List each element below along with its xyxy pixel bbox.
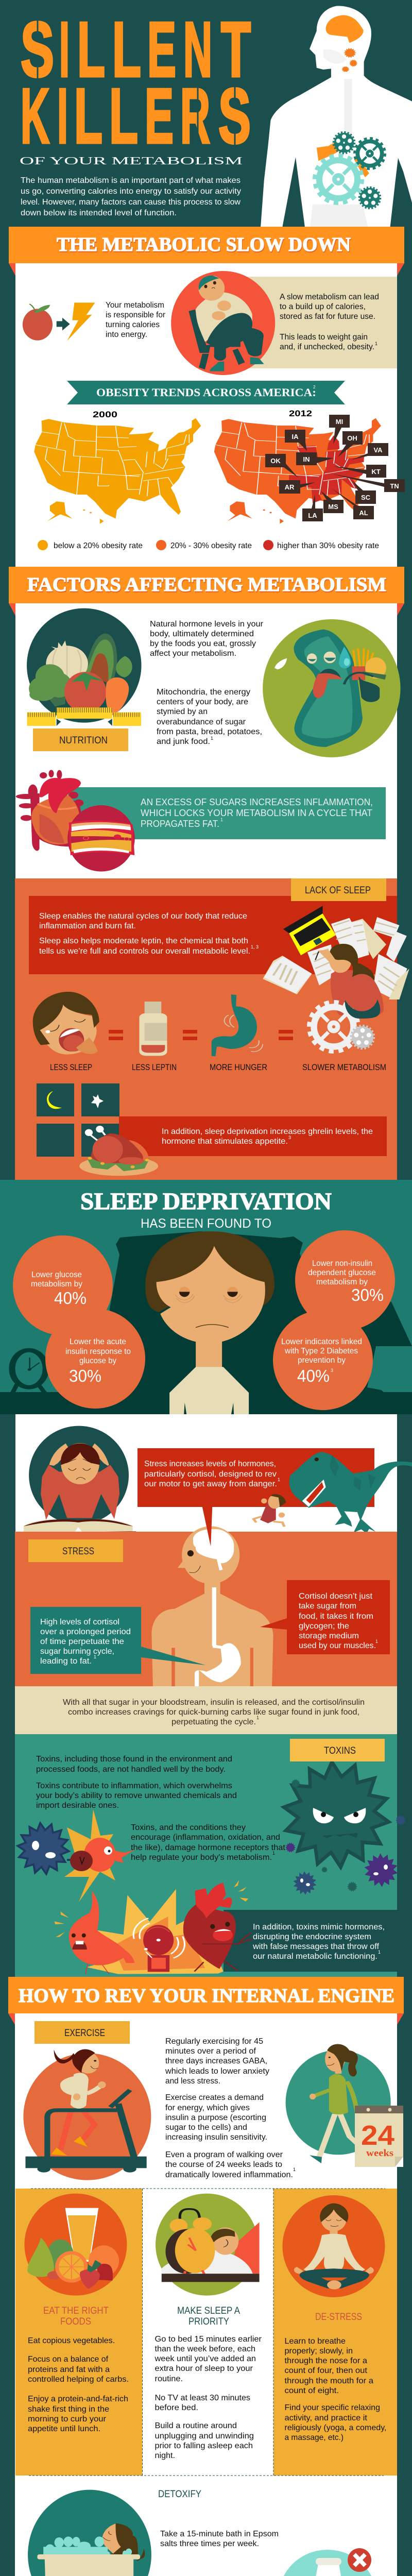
text: slow metabolism effects <box>280 293 379 351</box>
text: mitochondria: centers of your body, are <box>157 698 248 706</box>
illustration: overworked woman, laptop and papers <box>263 906 409 1018</box>
label: stress: STRESS <box>62 1546 94 1557</box>
text: sleep benefits: 1, 3 <box>251 944 259 950</box>
label: lack of sleep <box>291 878 386 901</box>
column: de-stress: DE-STRESS <box>315 2312 362 2323</box>
text: exercise: insulin a purpose (escorting <box>165 2113 266 2122</box>
title: L <box>112 6 141 93</box>
text: exercise: and less stress. <box>165 2077 220 2086</box>
title: T <box>221 6 251 93</box>
text: mimic hormones: 1 <box>378 1950 381 1955</box>
icon: less leptin bottle <box>139 1002 167 1056</box>
column: make sleep a priority: PRIORITY <box>188 2316 229 2327</box>
title: R <box>180 72 210 159</box>
heading: sleep deprivation <box>80 1188 332 1231</box>
callout: glycogen: storage medium <box>299 1632 359 1640</box>
illustration: tired mitochondria <box>263 619 401 757</box>
text: hormones: body, ultimately determined <box>150 630 254 638</box>
state callouts: IA <box>291 433 299 440</box>
callout: high cortisol: 1 <box>94 1654 96 1659</box>
band: insulin combo: With all that sugar in your bloodstream, insulin is released, and the cortisol/insulin <box>63 1698 365 1707</box>
illustration: walking woman <box>286 2044 391 2163</box>
text: mimic hormones: our natural metabolic functioning. <box>253 1952 377 1961</box>
illustration: toxin punching receptor <box>13 1809 135 1902</box>
column: make sleep a priority: before bed. <box>154 2403 198 2412</box>
text: metabolism role: turning calories <box>106 320 160 329</box>
stat bubble: acute insulin response: 30% <box>69 1366 101 1385</box>
panel: factors affecting metabolism <box>15 603 397 878</box>
column: make sleep a priority: Go to bed 15 minutes earlier <box>154 2335 262 2344</box>
text: mitochondria: from pasta, bread, potatoes, <box>157 727 262 736</box>
text: hormones: Natural hormone levels in your <box>150 620 264 629</box>
text: exercise: Even a program of walking over <box>165 2150 283 2159</box>
heading: sleep deprivation: HAS BEEN FOUND TO <box>141 1216 271 1231</box>
text: slow metabolism effects: This leads to weight gain <box>280 333 368 342</box>
callout: glycogen: used by our muscles. <box>299 1641 376 1650</box>
column: eat the right foods <box>28 2306 129 2433</box>
text: mimic hormones: In addition, toxins mimic hormones, <box>253 1923 385 1931</box>
stat bubble: non-insulin glucose: metabolism by <box>316 1278 368 1286</box>
callout: glycogen: take sugar from <box>299 1602 356 1611</box>
label: stress <box>28 1539 123 1562</box>
equals signs <box>109 1030 293 1040</box>
stat bubble: type 2 diabetes: 40% <box>297 1366 330 1385</box>
stat bubble: acute insulin response: glucose by <box>79 1357 116 1365</box>
column: de-stress: Find your specific relaxing <box>284 2403 380 2412</box>
state callouts: MS <box>328 503 338 511</box>
banner: how to rev your internal engine <box>8 1977 404 2025</box>
text: toxins overview: Toxins contribute to inflammation, which overwhelms <box>36 1782 232 1790</box>
stat bubble: lower glucose metabolism: Lower glucose <box>31 1270 82 1279</box>
column: make sleep a priority: prior to falling asleep each <box>154 2442 253 2450</box>
column: eat the right foods: Focus on a balance of <box>28 2355 109 2364</box>
callout: ghrelin <box>119 1116 387 1156</box>
intro paragraph: level. However, many factors can cause this process to slow <box>21 198 241 207</box>
title: E <box>145 72 174 159</box>
legend: higher than 30% obesity rate <box>277 541 379 550</box>
column: eat the right foods: EAT THE RIGHT <box>43 2306 109 2316</box>
text: hormone receptors <box>131 1823 286 1862</box>
title <box>21 6 251 159</box>
window at night <box>37 1083 119 1157</box>
illustration: yawning face <box>33 992 99 1055</box>
subtitle: OF YOUR METABOLISM <box>20 155 243 167</box>
text: exercise: 1 <box>293 2167 296 2172</box>
stat bubble: non-insulin glucose <box>295 1230 395 1330</box>
callout: glycogen <box>260 1580 390 1654</box>
panel: mimic hormones <box>224 1910 397 1972</box>
equation labels: SLOWER METABOLISM <box>302 1062 386 1072</box>
label: lack of sleep: LACK OF SLEEP <box>305 885 371 896</box>
label: exercise: EXERCISE <box>64 2028 105 2039</box>
state callouts: SC <box>361 494 371 501</box>
column: de-stress: through the nose for a <box>284 2357 367 2365</box>
text: mitochondria: overabundance of sugar <box>157 718 246 726</box>
column: eat the right foods: shake first thing in the <box>28 2405 109 2414</box>
column: make sleep a priority: week until you’ve added an <box>154 2354 256 2363</box>
text: mitochondria: stymied by an <box>157 707 208 716</box>
stat bubble: lower glucose metabolism <box>13 1235 113 1335</box>
column: de-stress: properly; slowly, in <box>284 2347 353 2355</box>
column: de-stress: through the mouth for a <box>284 2377 373 2385</box>
text: mitochondria: and junk food. <box>157 737 210 746</box>
icon: calendar 24 weeks: weeks <box>366 2148 393 2159</box>
title: S <box>218 72 251 159</box>
text: exercise: for energy, which gives <box>165 2104 250 2112</box>
header: human body illustration <box>261 6 412 227</box>
title: I <box>59 6 70 93</box>
text: mimic hormones: disrupting the endocrine system <box>253 1933 371 1941</box>
panel: stress body <box>15 1532 397 1686</box>
state callouts: TN <box>390 482 399 490</box>
map: 2000 obesity <box>34 418 201 524</box>
text: exercise: the course of 24 weeks leads to <box>165 2160 282 2169</box>
text: toxins overview: import desirable ones. <box>36 1801 119 1810</box>
state callouts: OH <box>347 434 357 442</box>
callout: stress hormones: Stress increases levels of hormones, <box>144 1460 276 1468</box>
text: hormone receptors: the like), damage hormone receptors that <box>131 1843 286 1852</box>
text: toxins overview <box>36 1755 237 1810</box>
panel: de-stress <box>273 2189 397 2476</box>
title: S <box>21 6 54 93</box>
text: metabolism role: into energy. <box>106 330 147 339</box>
stat bubble: non-insulin glucose: Lower non-insulin <box>312 1259 372 1268</box>
title: K <box>21 72 49 159</box>
intro paragraph: The human metabolism is an important part of what makes <box>21 176 241 185</box>
title: L <box>77 6 105 93</box>
callout: high cortisol: sugar burning cycle, <box>40 1647 114 1656</box>
text: mitochondria <box>157 688 262 746</box>
stat bubble: type 2 diabetes: with Type 2 Diabetes <box>284 1347 358 1355</box>
text: exercise: minutes over a period of <box>165 2047 256 2056</box>
legend: 20% - 30% obesity rate <box>170 541 252 550</box>
column: make sleep a priority: No TV at least 30 minutes <box>154 2394 250 2402</box>
text: toxins overview: your body’s ability to remove unwanted chemicals and <box>36 1791 237 1800</box>
illustration: woman's foot <box>345 999 380 1019</box>
banner: factors affecting metabolism: FACTORS AFFECTING METABOLISM <box>27 574 386 596</box>
panel: stress upper <box>15 1414 397 1532</box>
stat bubble: type 2 diabetes: Lower indicators linked <box>281 1337 362 1346</box>
label: toxins <box>290 1739 385 1761</box>
column: make sleep a priority: than the week before, each <box>154 2345 255 2353</box>
heading: detoxify: DETOXIFY <box>158 2489 201 2500</box>
text: mimic hormones: with false messages that throw off <box>252 1942 380 1951</box>
band: excess sugars: 1 <box>220 817 223 822</box>
text: mitochondria: 1 <box>211 736 213 741</box>
stat bubble: acute insulin response: insulin response to <box>65 1347 131 1356</box>
icon: calendar 24 weeks: 24 <box>361 2120 394 2151</box>
column: de-stress: activity, and practice it <box>284 2414 368 2422</box>
column: eat the right foods: Enjoy a protein-and-fat-rich <box>28 2395 128 2403</box>
illustration: treadmill runner <box>23 2049 151 2180</box>
callout band: slow metabolism <box>223 277 397 368</box>
stat bubble: non-insulin glucose: 30% <box>351 1285 384 1304</box>
panel: how to rev <box>15 2013 397 2576</box>
text: hormone receptors: help regulate your body’s metabolism. <box>131 1853 272 1862</box>
column: make sleep a priority: Build a routine around <box>154 2421 237 2430</box>
text: epsom bath: salts three times per week. <box>160 2539 259 2548</box>
title: I <box>57 72 68 159</box>
text: epsom bath <box>160 2530 279 2548</box>
column: de-stress: religiously (yoga, a comedy, <box>284 2424 386 2432</box>
column: eat the right foods: proteins and fat with a <box>28 2365 110 2374</box>
callout: glycogen: glycogen; the <box>299 1622 349 1631</box>
banner: the metabolic slow down <box>9 227 404 276</box>
state callouts: AR <box>285 483 295 491</box>
text: exercise: Regularly exercising for 45 <box>165 2037 263 2046</box>
ribbon: obesity trends heading <box>67 381 345 404</box>
label: nutrition: NUTRITION <box>59 735 108 746</box>
banner: how to rev your internal engine: HOW TO REV YOUR INTERNAL ENGINE <box>19 1985 394 2007</box>
illustration: dinosaur chasing caveman <box>253 1452 412 1534</box>
callout: stress hormones: particularly cortisol, designed to rev <box>144 1470 277 1479</box>
title: N <box>183 6 212 93</box>
stat bubble: acute insulin response <box>45 1309 145 1409</box>
state callouts: IN <box>303 455 310 463</box>
state callouts: KT <box>371 468 381 476</box>
illustration: heart and clogged artery <box>16 770 135 872</box>
column: de-stress <box>284 2312 386 2442</box>
text: slow metabolism effects: to a build up of calories, <box>280 302 366 311</box>
callout: ghrelin: 3 <box>288 1135 291 1140</box>
callout: stress hormones: our motor to get away from danger. <box>144 1480 277 1488</box>
band: insulin combo <box>15 1686 397 1734</box>
text: toxins overview: Toxins, including those found in the environment and <box>36 1755 232 1764</box>
stat bubble: type 2 diabetes: prevention by <box>298 1356 346 1365</box>
ribbon: obesity trends heading: OBESITY TRENDS ACROSS AMERICA: <box>96 386 316 399</box>
text: toxins overview: processed foods, are not handled well by the body. <box>36 1765 226 1774</box>
text: sleep benefits: Sleep also helps moderate leptin, the chemical that both <box>39 937 248 945</box>
text: hormones: affect your metabolism. <box>150 649 236 658</box>
text: exercise: increasing insulin sensitivity. <box>165 2133 267 2142</box>
intro paragraph <box>21 176 241 217</box>
callout: high cortisol: of time perpetuate the <box>40 1637 124 1646</box>
band: excess sugars <box>68 787 386 839</box>
text: hormone receptors: encourage (inflammation, oxidation, and <box>131 1833 280 1842</box>
equation labels: MORE HUNGER <box>210 1062 267 1072</box>
state callouts: LA <box>308 512 317 519</box>
legend <box>38 540 379 550</box>
text: mimic hormones <box>252 1923 385 1961</box>
column: make sleep a priority: night. <box>154 2451 175 2460</box>
illustration: milk bottle with recycling logo <box>279 2548 376 2576</box>
text: slow metabolism effects: A slow metabolism can lead <box>280 293 379 301</box>
column: eat the right foods: controlled helping of carbs. <box>28 2375 129 2384</box>
callout: high cortisol: High levels of cortisol <box>40 1618 119 1626</box>
panel: metabolic slow down <box>15 263 397 567</box>
title: E <box>147 6 176 93</box>
illustration: meditating woman <box>282 2195 385 2297</box>
text: sleep benefits: Sleep enables the natural cycles of our body that reduce <box>39 912 247 921</box>
text: exercise <box>165 2037 296 2179</box>
equation labels <box>50 1062 386 1072</box>
illustration: roast turkey <box>79 1126 158 1176</box>
column: eat the right foods: FOODS <box>60 2316 91 2327</box>
text: sleep benefits <box>39 912 259 956</box>
text: exercise: Exercise creates a demand <box>165 2093 264 2102</box>
stat bubble: non-insulin glucose: dependent glucose <box>308 1268 376 1277</box>
text: metabolism role: is responsible for <box>106 311 166 319</box>
panel: eat the right foods <box>15 2189 142 2476</box>
banner: the metabolic slow down: THE METABOLIC SLOW DOWN <box>57 234 351 256</box>
column: make sleep a priority: extra hour of sleep to your <box>154 2364 253 2373</box>
icon: calendar 24 weeks <box>355 2106 403 2167</box>
column: de-stress: count of eight. <box>284 2386 339 2395</box>
text: mitochondria: Mitochondria, the energy <box>157 688 250 697</box>
ribbon: obesity trends heading: 2 <box>313 385 316 389</box>
illustration: tired person <box>145 1231 274 1414</box>
callout: glycogen: food, it takes it from <box>299 1612 373 1621</box>
title: L <box>109 72 138 159</box>
illustration: body with brain and stomach <box>151 1507 273 1686</box>
panel: sleep text block <box>29 896 397 974</box>
callout: high cortisol: over a prolonged period <box>40 1628 131 1636</box>
column: make sleep a priority: unplugging and unwinding <box>154 2432 254 2441</box>
text: slow metabolism effects: 1 <box>375 341 377 346</box>
illustration: big toxin <box>272 1752 400 1877</box>
band: excess sugars: WHICH LOCKS YOUR METABOLISM IN A CYCLE THAT <box>141 808 372 818</box>
gears <box>315 132 385 209</box>
callout: stress hormones: 1 <box>278 1477 280 1482</box>
callout: glycogen: Cortisol doesn’t just <box>299 1592 373 1601</box>
banner: factors affecting metabolism <box>9 567 404 616</box>
stat bubble: acute insulin response: Lower the acute <box>70 1337 126 1346</box>
text: sleep benefits: tells us we’re full and controls our overall metabolic level. <box>39 947 250 956</box>
dark bedroom: pillow, lamp and table <box>0 1231 412 1414</box>
callout: ghrelin: In addition, sleep deprivation increases ghrelin levels, the <box>162 1127 373 1136</box>
illustration: shake and fruit <box>24 2194 127 2296</box>
state callouts <box>265 415 405 521</box>
callout: high cortisol: leading to fat. <box>40 1657 92 1666</box>
illustration: stomach, alarm and heart <box>55 1880 252 1974</box>
map: 2012 obesity <box>214 418 381 524</box>
illustration: stressed woman with book <box>19 1426 136 1535</box>
icon: alarm clock <box>12 1350 46 1393</box>
text: metabolism role: Your metabolism <box>106 301 164 310</box>
column: eat the right foods: appetite until lunch. <box>28 2425 100 2433</box>
title: L <box>74 72 102 159</box>
text: hormones: by the foods you eat, grossly <box>150 639 256 648</box>
callout: stress hormones <box>138 1448 374 1507</box>
column: make sleep a priority: MAKE SLEEP A <box>177 2306 240 2316</box>
map label: 2012: 2012 <box>289 409 312 418</box>
text: hormones <box>150 620 264 658</box>
state callouts: OK <box>270 457 281 465</box>
panel: lack of sleep <box>15 878 397 1180</box>
text: epsom bath: Take a 15-minute bath in Epsom <box>160 2530 279 2538</box>
column: eat the right foods: Eat copious vegetables. <box>28 2336 115 2345</box>
callout: glycogen: 1 <box>375 1639 378 1644</box>
text: slow metabolism effects: and, if unchecked, obesity. <box>280 343 374 351</box>
stat bubble: type 2 diabetes <box>273 1310 373 1410</box>
label: exercise <box>35 2021 130 2044</box>
illustration: bath <box>28 2490 151 2576</box>
legend: below a 20% obesity rate <box>54 541 143 550</box>
band: excess sugars: AN EXCESS OF SUGARS INCREASES INFLAMMATION, <box>141 797 373 807</box>
text: exercise: dramatically lowered inflammation. <box>165 2171 293 2179</box>
illustration: vegetables and tape measure <box>27 608 141 726</box>
panel: sleep deprivation <box>0 1180 412 1392</box>
column: eat the right foods: morning to curb your <box>28 2415 107 2424</box>
column: make sleep a priority: routine. <box>154 2375 183 2383</box>
icon: slower metabolism gears <box>309 1002 374 1052</box>
column: de-stress: count of four, then out <box>284 2366 368 2375</box>
text: slow metabolism effects: stored as fat for future use. <box>280 312 375 321</box>
intro paragraph: us go, converting calories into energy to satisfy our activity <box>21 187 241 196</box>
illustration: sleeping with alarm clock <box>156 2194 260 2296</box>
band: excess sugars: PROPAGATES FAT. <box>141 819 219 829</box>
callout: high cortisol <box>30 1607 205 1674</box>
equation labels: LESS LEPTIN <box>132 1062 177 1072</box>
icon: hungry stomach <box>212 994 263 1056</box>
intro paragraph: down below its intended level of function. <box>21 209 177 217</box>
text: sleep benefits: inflammation and burn fat. <box>39 922 136 930</box>
text: exercise: which leads to lower anxiety <box>165 2067 269 2076</box>
state callouts: AL <box>359 509 368 517</box>
state callouts: VA <box>373 446 383 454</box>
panel: toxins <box>15 1734 397 1977</box>
band: insulin combo: 1 <box>256 1715 259 1720</box>
text: metabolism role <box>106 301 166 339</box>
text: exercise: three days increases GABA, <box>165 2057 267 2065</box>
stat bubble: lower glucose metabolism: 40% <box>54 1289 87 1308</box>
text: hormone receptors: Toxins, and the conditions they <box>131 1823 246 1832</box>
equation labels: LESS SLEEP <box>50 1062 92 1072</box>
map label: 2000: 2000 <box>93 410 117 419</box>
state callouts: MI <box>336 418 343 426</box>
dashed guides <box>29 2189 385 2476</box>
stat bubble: type 2 diabetes: 3 <box>331 1368 333 1373</box>
label: nutrition <box>33 728 128 751</box>
band: insulin combo: perpetuating the cycle. <box>171 1718 256 1726</box>
text: hormone receptors: 1 <box>272 1851 275 1856</box>
small toxins <box>285 1779 406 1896</box>
icon: apple to energy <box>23 302 95 341</box>
stat bubble: lower glucose metabolism: metabolism by <box>31 1280 82 1289</box>
label: toxins: TOXINS <box>324 1745 356 1756</box>
text: exercise: sugar to the cells) and <box>165 2123 247 2132</box>
column: de-stress: Learn to breathe <box>284 2337 346 2346</box>
callout: ghrelin: hormone that stimulates appetite. <box>162 1137 288 1146</box>
illustration: overweight man on chair <box>171 271 275 375</box>
heading: sleep deprivation: SLEEP DEPRIVATION <box>80 1188 332 1215</box>
column: make sleep a priority <box>154 2306 262 2460</box>
band: insulin combo: combo increases cravings for quick-burning carbs like sugar found in junk food, <box>68 1708 359 1717</box>
column: de-stress: a massage, etc.) <box>284 2433 344 2442</box>
